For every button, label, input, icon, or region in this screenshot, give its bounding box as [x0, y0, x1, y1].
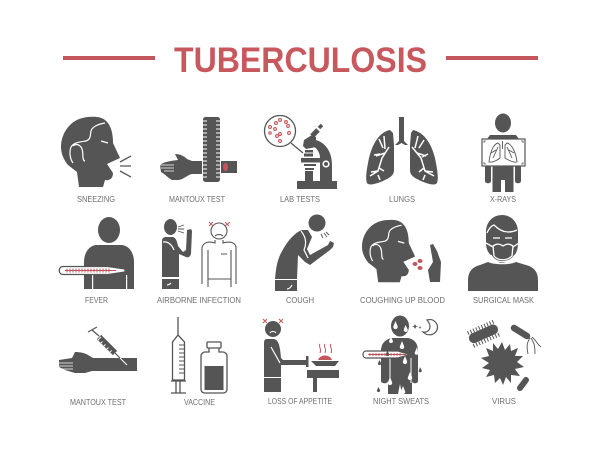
- label: SNEEZING: [77, 195, 115, 204]
- icon: night sweats: [363, 316, 437, 394]
- label: MANTOUX TEST: [70, 398, 126, 407]
- label: AIRBORNE INFECTION: [157, 296, 241, 305]
- label: COUGH: [286, 296, 314, 305]
- label: LAB TESTS: [280, 195, 320, 204]
- icon: fever: [59, 217, 134, 289]
- label: NIGHT SWEATS: [373, 397, 429, 406]
- title: TUBERCULOSIS: [174, 41, 427, 80]
- icon: sneezing: [61, 117, 131, 187]
- icon: cough: [275, 214, 334, 291]
- icon: virus and bacteria: [466, 319, 541, 388]
- icon: injection in arm: [59, 327, 137, 373]
- icon: airborne infection: [162, 219, 236, 289]
- icon: loss of appetite: [263, 319, 339, 392]
- icon: lungs: [366, 117, 438, 184]
- label: MANTOUX TEST: [169, 195, 225, 204]
- icon: surgical mask: [468, 215, 538, 291]
- icon: vaccine syringe and vial: [171, 317, 227, 393]
- label: LUNGS: [389, 195, 415, 204]
- icon: mantoux test ruler: [160, 117, 237, 182]
- icon: x-ray person: [482, 114, 525, 192]
- label: VIRUS: [492, 397, 516, 406]
- icon: coughing up blood: [362, 220, 441, 282]
- label: X-RAYS: [490, 195, 516, 204]
- label: COUGHING UP BLOOD: [360, 296, 445, 305]
- label: FEVER: [85, 296, 108, 305]
- icon: microscope: [264, 116, 337, 189]
- label: SURGICAL MASK: [473, 296, 535, 305]
- label: LOSS OF APPETITE: [268, 397, 332, 406]
- label: VACCINE: [184, 398, 215, 407]
